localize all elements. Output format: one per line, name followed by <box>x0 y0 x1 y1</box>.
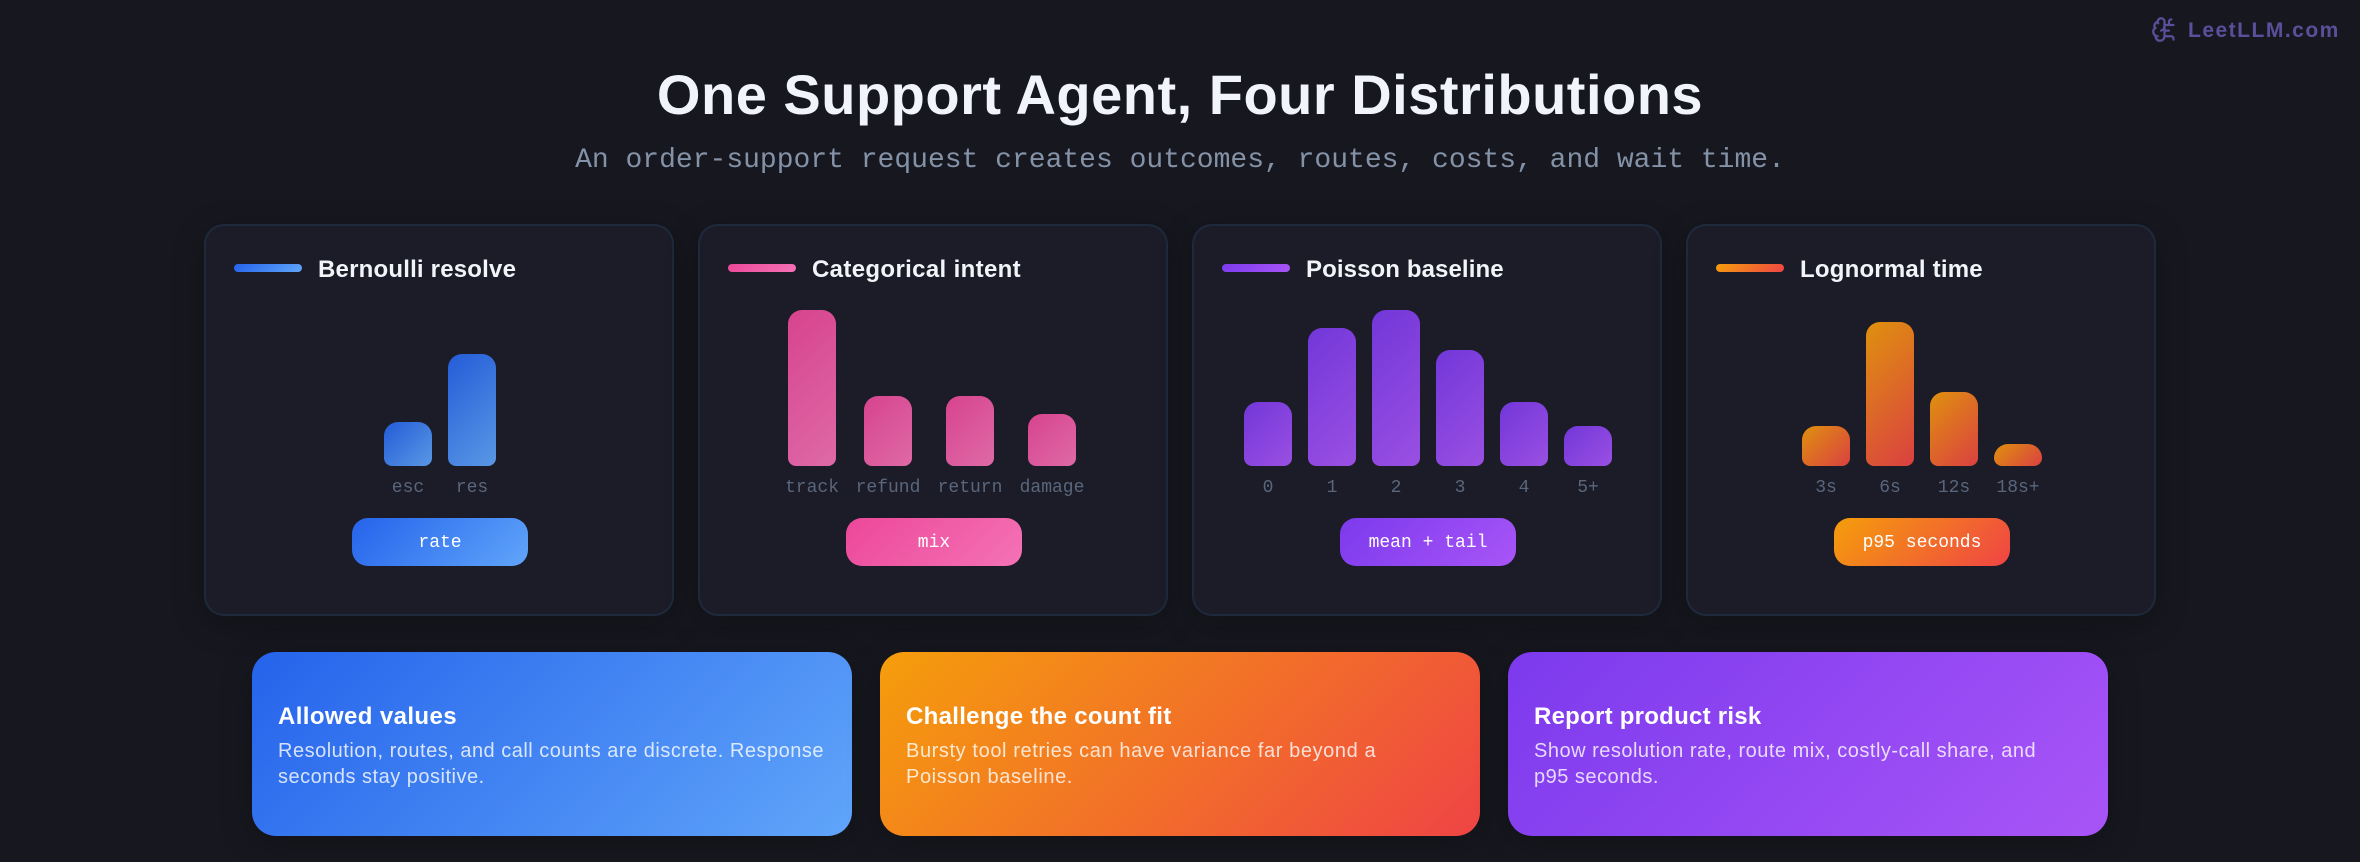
bar: 2: 2 <box>1391 478 1401 498</box>
callout text <box>906 740 1376 788</box>
bar chart: call counts <box>1244 310 1612 498</box>
bar: 3 <box>1436 350 1484 498</box>
bar chart: resolve vs escalate <box>384 354 496 498</box>
logo text: LeetLLM.com <box>2188 19 2340 42</box>
panel: Bernoulli resolve <box>204 224 674 616</box>
tag: p95 seconds: p95 seconds <box>1863 533 1981 553</box>
bar: 2 <box>1372 310 1420 498</box>
bar: 3s: 3s <box>1815 478 1837 498</box>
bar chart: intent mix <box>785 310 1084 498</box>
callout text: seconds stay positive. <box>278 766 485 788</box>
bar: res <box>448 354 496 498</box>
bar: 1 <box>1308 328 1356 498</box>
tag: rate <box>352 518 528 566</box>
callout heading: Report product risk <box>1534 703 1761 730</box>
callout text: Bursty tool retries can have variance far beyond a <box>906 740 1376 762</box>
card heading: Lognormal time <box>1800 256 1983 283</box>
accent bar <box>728 264 796 272</box>
callout text <box>1534 740 2036 788</box>
card heading: Categorical intent <box>812 256 1021 283</box>
tag: mean + tail: mean + tail <box>1369 533 1487 553</box>
bar chart: response seconds <box>1802 322 2042 498</box>
bar: 3s <box>1802 426 1850 498</box>
callout text: p95 seconds. <box>1534 766 1659 788</box>
subtitle: An order-support request creates outcomes, routes, costs, and wait time. <box>575 145 1785 176</box>
bar: track <box>785 310 839 498</box>
callout: Allowed values <box>252 652 852 836</box>
title: One Support Agent, Four Distributions <box>657 63 1703 126</box>
accent bar <box>1716 264 1784 272</box>
bar: 5+ <box>1564 426 1612 498</box>
bar: res: res <box>456 478 488 498</box>
bar: 4: 4 <box>1519 478 1529 498</box>
callout text: Resolution, routes, and call counts are discrete. Response <box>278 740 824 762</box>
panel: Poisson baseline <box>1192 224 1662 616</box>
bar: damage <box>1020 414 1084 498</box>
bar: refund <box>856 396 920 498</box>
bar: 18s+: 18s+ <box>1996 478 2040 498</box>
bar: 3: 3 <box>1455 478 1465 498</box>
callout heading: Allowed values <box>278 703 457 730</box>
tag: mix: mix <box>918 533 950 553</box>
bar: 4 <box>1500 402 1548 498</box>
card heading: Bernoulli resolve <box>318 256 516 283</box>
callout text: Show resolution rate, route mix, costly-call share, and <box>1534 740 2036 762</box>
callout: Challenge the count fit <box>880 652 1480 836</box>
callout text <box>278 740 824 788</box>
bar: 0 <box>1244 402 1292 498</box>
icon: brain circuit <box>2152 17 2175 42</box>
bar: 12s: 12s <box>1938 478 1970 498</box>
tag: p95 seconds <box>1834 518 2010 566</box>
callout: Report product risk <box>1508 652 2108 836</box>
accent bar <box>234 264 302 272</box>
bar: 6s: 6s <box>1879 478 1901 498</box>
accent bar <box>1222 264 1290 272</box>
logo: LeetLLM.com <box>2152 17 2340 42</box>
callout heading: Challenge the count fit <box>906 703 1172 730</box>
panel: Categorical intent <box>698 224 1168 616</box>
bar: 12s <box>1930 392 1978 498</box>
card heading: Poisson baseline <box>1306 256 1504 283</box>
bar: return <box>938 396 1002 498</box>
bar: esc: esc <box>392 478 424 498</box>
tag: mix <box>846 518 1022 566</box>
callout text: Poisson baseline. <box>906 766 1073 788</box>
bar: track: track <box>785 478 839 498</box>
tag: mean + tail <box>1340 518 1516 566</box>
tag: rate: rate <box>418 533 462 553</box>
bar: 18s+ <box>1994 444 2042 498</box>
bar: 5+: 5+ <box>1577 478 1599 498</box>
bar: 0: 0 <box>1263 478 1273 498</box>
bar: refund: refund <box>856 478 920 498</box>
bar: esc <box>384 422 432 498</box>
bar: 6s <box>1866 322 1914 498</box>
bar: damage: damage <box>1020 478 1084 498</box>
bar: return: return <box>938 478 1002 498</box>
panel: Lognormal time <box>1686 224 2156 616</box>
bar: 1: 1 <box>1327 478 1337 498</box>
